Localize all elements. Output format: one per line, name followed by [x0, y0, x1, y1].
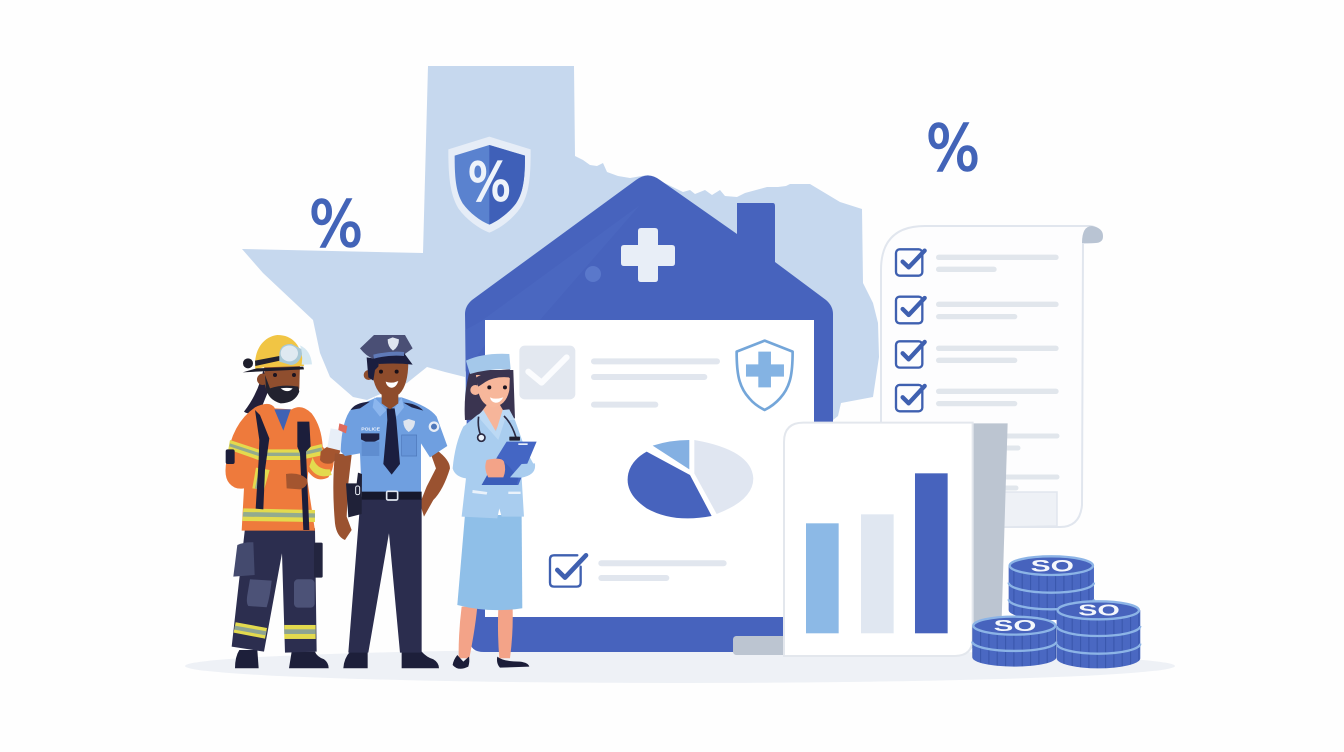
roof highlight — [465, 205, 640, 372]
clipboard contents — [519, 341, 793, 587]
percent sign right: % — [926, 112, 980, 185]
shield with percent: % — [468, 152, 511, 213]
firefighter — [225, 335, 344, 668]
percent sign left: % — [309, 188, 363, 261]
police officer — [333, 335, 450, 668]
grey check tile — [519, 346, 575, 399]
bar chart panel — [733, 423, 1008, 656]
shield with cross — [737, 341, 793, 410]
medical cross — [621, 228, 675, 282]
text lines — [594, 361, 724, 578]
blue check box — [550, 555, 586, 587]
right stack: SO — [1078, 603, 1120, 620]
pie chart — [628, 440, 753, 518]
back stack — [1009, 556, 1094, 620]
white panel — [784, 423, 973, 656]
police officer: POLICE — [361, 427, 381, 433]
right stack — [1057, 601, 1140, 668]
roof dot — [585, 266, 601, 282]
checklist rows — [896, 249, 1056, 411]
scroll curl — [1082, 226, 1103, 243]
house body — [465, 176, 833, 652]
white sheet — [485, 320, 814, 617]
left stack: SO — [994, 618, 1036, 635]
ground shadow — [185, 649, 1175, 683]
coin stacks — [972, 556, 1140, 668]
back stack: SO — [1031, 556, 1074, 575]
checklist scroll document — [881, 226, 1103, 527]
grey tab — [733, 636, 786, 655]
shield with percent — [448, 137, 531, 233]
Texas map silhouette — [242, 66, 879, 420]
three first responders — [225, 335, 537, 669]
grey side page — [967, 423, 1008, 653]
house shaped clipboard — [465, 176, 833, 652]
nurse — [453, 354, 537, 669]
fold at scroll bottom — [1000, 492, 1057, 527]
left stack — [972, 617, 1056, 667]
bars — [806, 473, 948, 633]
lower scroll lines — [1005, 436, 1057, 488]
